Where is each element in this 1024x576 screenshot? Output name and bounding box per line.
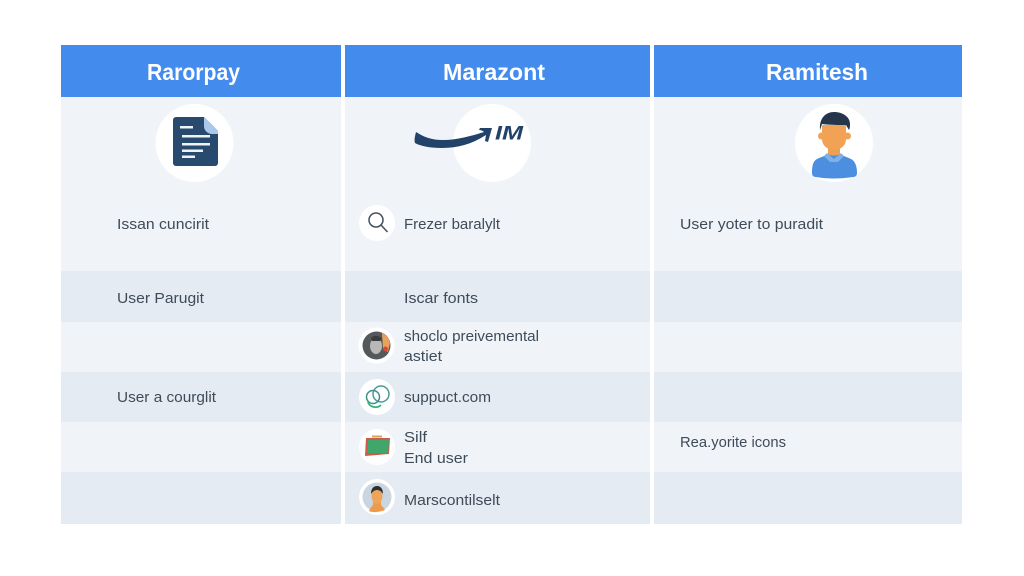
text: suppuct.com: suppuct.com — [404, 389, 491, 406]
text: User a courglit: User a courglit — [117, 389, 217, 406]
panel: column Ramitesh — [654, 45, 962, 524]
heading: Rarorpay — [61, 45, 341, 97]
icon: portrait photo — [358, 328, 394, 364]
text: Marscontilselt: Marscontilselt — [404, 492, 501, 509]
text: shoclo preivemental astiet: astiet — [404, 348, 443, 365]
panel: column Marazont — [345, 45, 650, 524]
text: User yoter to puradit: User yoter to puradit — [680, 216, 824, 233]
heading: Ramitesh: Ramitesh — [766, 59, 868, 85]
heading: Ramitesh — [654, 45, 962, 97]
text: Silf End user — [404, 429, 468, 467]
text: Issan cuncirit: Issan cuncirit — [117, 216, 210, 233]
heading: Rarorpay: Rarorpay — [147, 59, 240, 85]
icon: green card — [359, 429, 395, 465]
text: Silf End user: Silf — [404, 429, 428, 446]
icon: document — [156, 104, 234, 182]
icon: smile arrow logo: IM — [495, 124, 525, 144]
text: Silf End user: End user — [404, 450, 468, 467]
icon: magnifier — [359, 205, 395, 241]
icon: smile arrow logo — [415, 104, 531, 182]
text: shoclo preivemental astiet: shoclo preivemental — [404, 328, 539, 345]
text: User Parugit: User Parugit — [117, 290, 205, 307]
icon: user avatar — [795, 104, 873, 182]
heading: Marazont — [345, 45, 650, 97]
text: Rea.yorite icons: Rea.yorite icons — [680, 434, 786, 451]
icon: avatar — [359, 479, 395, 515]
panel: column Razorpay — [61, 45, 341, 524]
text: Iscar fonts: Iscar fonts — [404, 290, 478, 307]
text: shoclo preivemental astiet — [404, 328, 539, 365]
text: Frezer baralylt: Frezer baralylt — [404, 216, 501, 233]
icon: green rings — [359, 379, 395, 415]
heading: Marazont: Marazont — [443, 59, 545, 85]
